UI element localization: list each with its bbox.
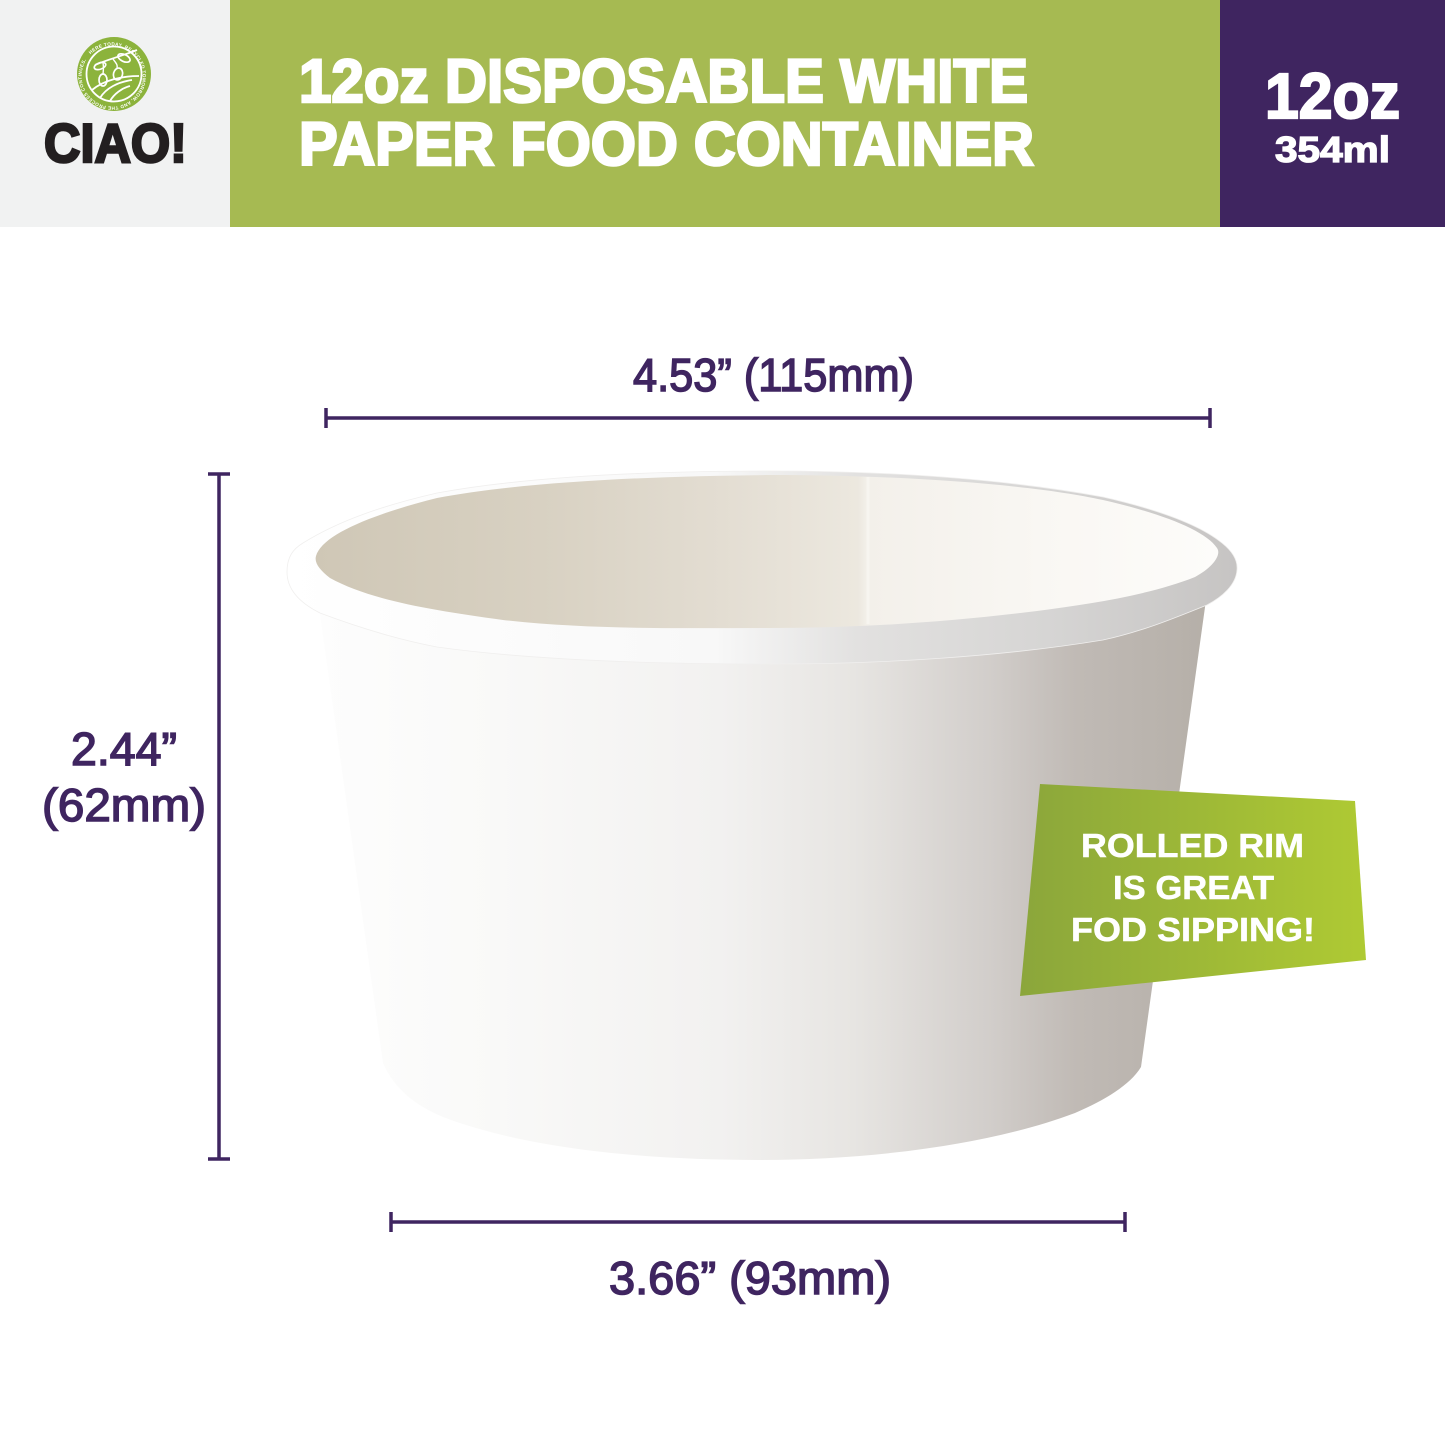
dimension: height: [42, 474, 230, 1159]
panel: capacity background: [1220, 0, 1445, 227]
logo wordmark: CIAO!: [44, 112, 187, 174]
bowl interior: [316, 475, 1218, 628]
callout: rolled rim: IS GREAT: [1113, 869, 1274, 906]
callout: rolled rim: FOD SIPPING!: [1071, 911, 1315, 948]
dimension: height: 2.44”: [71, 723, 177, 775]
callout: rolled rim: ROLLED RIM: [1081, 827, 1304, 864]
capacity label: 354ml: [1275, 129, 1390, 170]
dimension: bottom width: 3.66” (93mm): [609, 1252, 891, 1304]
panel: logo background: [0, 0, 230, 227]
dimension: height: (62mm): [42, 779, 206, 831]
dimension: top width: [326, 349, 1210, 428]
dimension: top width: 4.53” (115mm): [633, 349, 914, 401]
icon: recycled olive badge logo: HERE TODAY, RECYCLED TOMORROW, AND THE PROCESS CONTINUES.: [78, 42, 146, 110]
capacity label: 12oz: [1265, 60, 1400, 132]
title: [299, 47, 1034, 178]
bowl rim: [287, 471, 1237, 664]
bowl side seam: [866, 477, 870, 624]
paper bowl: [287, 471, 1237, 1180]
callout: rolled rim: [1020, 784, 1366, 996]
bowl body: [528, 606, 1206, 1160]
title: 12oz DISPOSABLE WHITE: [299, 47, 1028, 115]
panel: title background: [230, 0, 1220, 227]
dimension: bottom width: [391, 1212, 1125, 1304]
capacity label: [1265, 60, 1400, 170]
title: PAPER FOOD CONTAINER: [299, 110, 1034, 178]
